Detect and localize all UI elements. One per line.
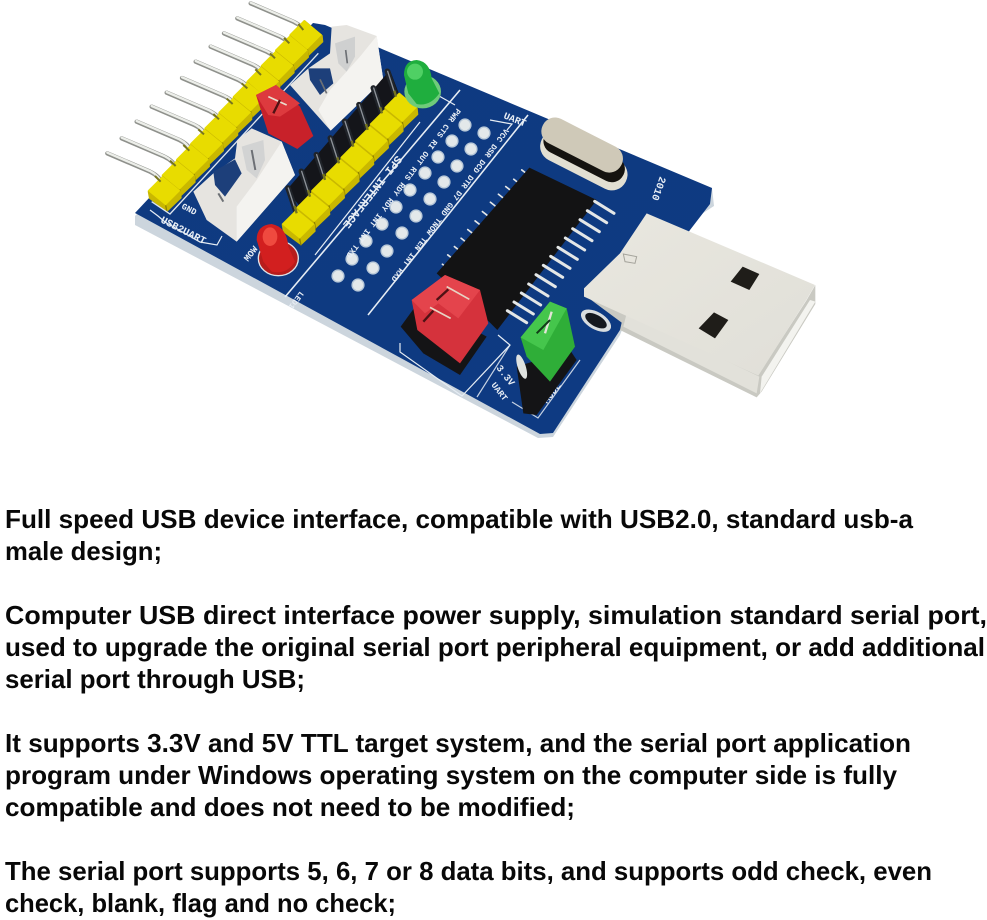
text block: power supply	[5, 600, 987, 694]
silkscreen labels: USB2UART	[158, 215, 207, 248]
chip, crystal, USB and jumpers	[401, 113, 815, 415]
red jumper, small	[256, 85, 313, 149]
text block: TTL support: program under Windows operating system on the computer side is fully	[5, 760, 898, 790]
black pins: SPI header	[287, 70, 400, 213]
silkscreen labels: SPI INTERFACE	[339, 153, 403, 230]
silkscreen labels: GND	[180, 202, 198, 218]
white connector: upper	[290, 25, 383, 131]
silkscreen labels: VCC DSR DCD DTR D7 GND TNOW TEN INT RXD	[389, 126, 510, 283]
silkscreen labels: MODE	[541, 381, 564, 406]
silkscreen labels: MOW	[242, 244, 261, 264]
text block: USB interface: male design;	[5, 536, 162, 566]
chip pins: left row	[441, 169, 527, 269]
silkscreen labels	[158, 106, 668, 406]
red LED	[257, 224, 298, 276]
text block: serial data bits: The serial port supports 5, 6, 7 or 8 data bits, and supports odd check, even	[5, 856, 932, 886]
chip body	[437, 168, 597, 330]
silkscreen labels: 3.3V	[494, 363, 517, 388]
silkscreen labels: LED1	[286, 289, 305, 310]
photo: USB to UART adapter board	[107, 3, 815, 438]
crystal	[535, 113, 633, 196]
silkscreen labels: UART	[489, 381, 509, 403]
text block: USB interface: Full speed USB device interface, compatible with USB2.0, standard usb-a	[5, 504, 914, 534]
yellow header: USB2UART	[148, 20, 323, 214]
through-hole pads	[331, 118, 491, 292]
text block: TTL support: compatible and does not need to be modified;	[5, 792, 575, 822]
silkscreen labels: 2010	[648, 175, 668, 202]
green LED	[404, 60, 441, 108]
text block: serial data bits: check, blank, flag and no check;	[5, 888, 396, 918]
silkscreen labels: PWR CTS RI OUT RTS RDY RDY INT INT TXD	[343, 106, 462, 259]
text block: power supply: Computer USB direct interface power supply, simulation standard serial port,	[5, 600, 987, 630]
green jumper	[514, 302, 577, 415]
chip pins: right row	[507, 201, 614, 323]
text block: power supply: serial port through USB;	[5, 664, 305, 694]
white connector: lower	[193, 128, 295, 242]
text block: power supply: used to upgrade the original serial port peripheral equipment, or add additional	[5, 632, 985, 662]
text block: USB interface	[5, 504, 914, 566]
connectors, headers and LEDs	[107, 3, 441, 276]
silkscreen labels: UART	[502, 111, 528, 130]
text block: serial data bits	[5, 856, 932, 918]
yellow header: SPI	[282, 91, 418, 245]
red jumper, large	[401, 275, 488, 375]
text block: TTL support	[5, 728, 911, 822]
right-angle pins	[107, 3, 306, 184]
circuit board	[135, 23, 714, 438]
USB plug	[577, 213, 815, 397]
text block: TTL support: It supports 3.3V and 5V TTL target system, and the serial port application	[5, 728, 911, 758]
